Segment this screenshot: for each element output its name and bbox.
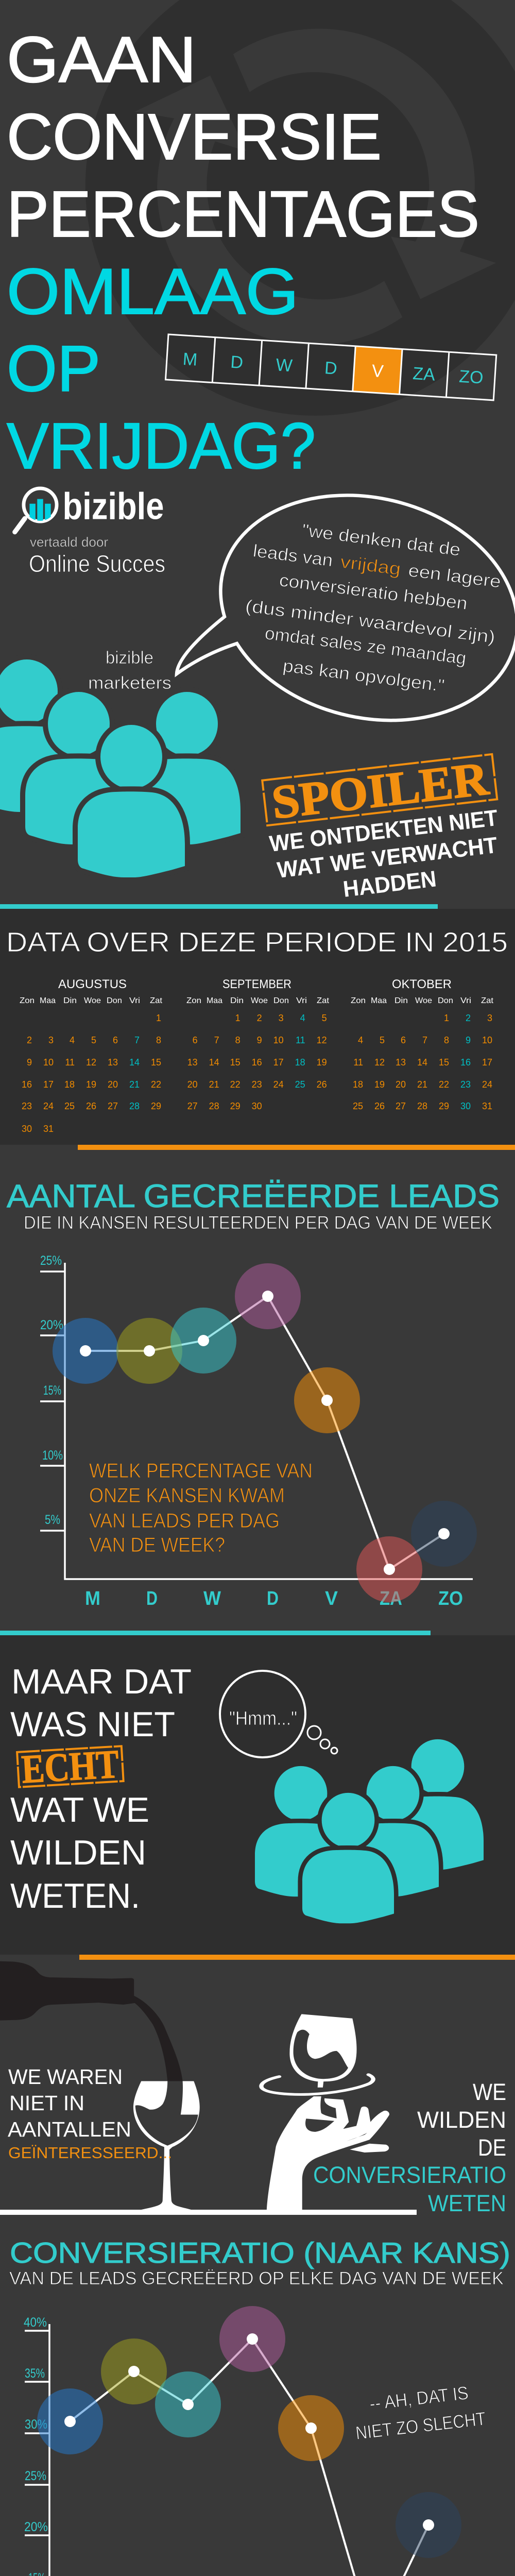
- text: we wilden de conversieratio weten: [313, 2079, 506, 2216]
- calendar: september: 30: [252, 1101, 262, 1111]
- calendar: oktober: 22: [439, 1079, 449, 1090]
- section background: calendar: [0, 909, 515, 1145]
- y axis labels: 30%: [25, 2417, 47, 2432]
- divider: orange: [79, 1955, 515, 1960]
- chart note: VAN DE WEEK?: [89, 1534, 225, 1556]
- calendar: oktober: 18: [353, 1079, 363, 1090]
- calendar: oktober: 4: [358, 1035, 363, 1045]
- heading: maar dat was niet echt wat we wilden weten: WILDEN: [10, 1833, 146, 1872]
- calendar: september: 17: [273, 1057, 284, 1067]
- text: we waren niet in aantallen geinteresseerd: GEÏNTERESSEERD...: [8, 2144, 172, 2162]
- weekday headers: Vri: [460, 996, 471, 1005]
- calendar: oktober: 29: [439, 1101, 449, 1111]
- y axis labels: 10%: [42, 1448, 63, 1463]
- speech bubble: marketers quote: omdat sales ze maandag: [264, 623, 468, 668]
- illustration: bottle pouring wine into glass: [0, 1961, 389, 2210]
- calendar: augustus: 8: [156, 1035, 161, 1045]
- y axis labels: 20%: [24, 2520, 48, 2534]
- speech bubble: marketers quote: (dus minder waardevol zijn): [244, 596, 496, 647]
- calendar: augustus: 22: [151, 1079, 161, 1090]
- weekday headers: Din: [394, 996, 408, 1005]
- calendar: augustus: 9: [27, 1057, 32, 1067]
- speech bubble: marketers quote: pas kan opvolgen.": [282, 656, 445, 696]
- calendar: september: 2: [257, 1013, 262, 1023]
- calendar: augustus: 3: [48, 1035, 54, 1045]
- calendar: oktober: 25: [353, 1101, 363, 1111]
- weekday headers: Zat: [150, 996, 163, 1005]
- section background: closing: [0, 1955, 515, 2576]
- calendar: augustus: 25: [64, 1101, 75, 1111]
- week strip with friday highlighted: D: [324, 358, 338, 379]
- divider: teal: [0, 1631, 431, 1635]
- heading: maar dat was niet echt wat we wilden weten: MAAR DAT: [11, 1662, 192, 1701]
- stamp: spoiler: SPOILER: [269, 752, 492, 829]
- calendar: oktober: 31: [482, 1101, 492, 1111]
- calendar: september: 8: [235, 1035, 241, 1045]
- shelf bar: white: [0, 2210, 417, 2215]
- icon: wine bottle and stream: [0, 1961, 183, 2081]
- data bubbles: [53, 1263, 477, 1602]
- label: bizible marketers: bizible: [106, 648, 153, 668]
- week strip with friday highlighted: ZO: [458, 367, 484, 388]
- calendar: augustus: 4: [70, 1035, 75, 1045]
- chart note: [89, 1460, 313, 1556]
- calendar: oktober: 27: [396, 1101, 406, 1111]
- calendar: augustus: 30: [22, 1124, 32, 1134]
- weekday headers: Zat: [481, 996, 494, 1005]
- speech bubble: marketers quote: leads van: [252, 541, 334, 570]
- calendar: augustus: 6: [113, 1035, 118, 1045]
- calendar: september: 28: [209, 1101, 219, 1111]
- x axis day labels: [85, 1588, 463, 1609]
- text: we wilden de conversieratio weten: DE: [478, 2134, 506, 2161]
- calendar: augustus: 23: [22, 1101, 32, 1111]
- stamp: echt: ECHT: [21, 1741, 120, 1791]
- calendar: september: 6: [193, 1035, 198, 1045]
- calendar: augustus: 20: [108, 1079, 118, 1090]
- calendar: augustus: 13: [108, 1057, 118, 1067]
- calendar: oktober: 30: [460, 1101, 471, 1111]
- divider: teal: [0, 904, 438, 909]
- calendar: augustus: 1: [156, 1013, 161, 1023]
- calendar: augustus: 15: [151, 1057, 161, 1067]
- calendar: oktober: 3: [487, 1013, 492, 1023]
- calendar: augustus: 27: [108, 1101, 118, 1111]
- calendar: oktober: 13: [396, 1057, 406, 1067]
- calendar: augustus: 2: [27, 1035, 32, 1045]
- calendar: augustus: 29: [151, 1101, 161, 1111]
- weekday headers: Woe: [84, 996, 101, 1005]
- calendar: oktober: 20: [396, 1079, 406, 1090]
- data points: [64, 2333, 434, 2576]
- week strip with friday highlighted: ZA: [412, 364, 436, 385]
- weekday headers: Zon: [186, 996, 201, 1005]
- calendar: oktober: 5: [380, 1035, 385, 1045]
- data line: [85, 1296, 444, 1569]
- weekday headers: Maa: [207, 996, 222, 1005]
- calendar: augustus: 28: [129, 1101, 140, 1111]
- title: PERCENTAGES: [7, 178, 479, 250]
- calendar: oktober: [353, 1013, 492, 1111]
- calendar: oktober: 1: [444, 1013, 449, 1023]
- text: we wilden de conversieratio weten: WILDEN: [417, 2107, 506, 2133]
- calendar: augustus: 26: [86, 1101, 96, 1111]
- heading: maar dat was niet echt wat we wilden weten: WAS NIET: [10, 1705, 175, 1744]
- weekday headers: [20, 996, 494, 1005]
- chart: conversieratio: [24, 2306, 487, 2576]
- divider: orange: [78, 1145, 515, 1150]
- subheading: die in kansen: DIE IN KANSEN RESULTEERDEN PER DAG VAN DE WEEK: [24, 1213, 492, 1233]
- heading: maar dat was niet echt wat we wilden weten: [10, 1662, 192, 1916]
- title: OMLAAG: [7, 255, 299, 328]
- x axis day labels: D: [267, 1588, 279, 1609]
- month labels: AUGUSTUS: [58, 977, 127, 991]
- text: we ontdekten niet wat we verwacht hadden: HADDEN: [342, 866, 438, 902]
- calendar: september: 13: [187, 1057, 198, 1067]
- calendar: oktober: 2: [466, 1013, 471, 1023]
- calendar: augustus: 16: [22, 1079, 32, 1090]
- credit: vertaald door Online Succes: [29, 534, 165, 577]
- calendar: augustus: 19: [86, 1079, 96, 1090]
- calendar: augustus: 5: [91, 1035, 96, 1045]
- calendar: augustus: 24: [43, 1101, 54, 1111]
- heading: aantal gecreeerde leads: AANTAL GECREËERDE LEADS: [7, 1178, 500, 1214]
- speech bubble: marketers quote: conversieratio hebben: [278, 570, 469, 614]
- calendar: augustus: 12: [86, 1057, 96, 1067]
- calendar: oktober: 19: [374, 1079, 385, 1090]
- calendar: september: 15: [230, 1057, 241, 1067]
- x axis day labels: ZO: [438, 1588, 463, 1609]
- people group: thinking: [255, 1739, 484, 1923]
- annotation: ah dat is niet zo slecht: [354, 2382, 487, 2444]
- y axis labels: 25%: [25, 2469, 46, 2483]
- weekday headers: Don: [107, 996, 122, 1005]
- calendar: oktober: 14: [417, 1057, 427, 1067]
- weekday headers: Woe: [251, 996, 268, 1005]
- title: CONVERSIE: [7, 100, 382, 173]
- calendar: september: 29: [230, 1101, 241, 1111]
- subheading: van de leads: VAN DE LEADS GECREËERD OP ELKE DAG VAN DE WEEK: [9, 2268, 504, 2289]
- heading: maar dat was niet echt wat we wilden weten: WAT WE: [10, 1790, 149, 1829]
- weekday headers: Don: [273, 996, 289, 1005]
- logo: bizible top: bizible: [63, 485, 164, 527]
- calendar: september: 12: [317, 1035, 327, 1045]
- calendar: september: 3: [279, 1013, 284, 1023]
- y axis labels: 15%: [43, 1383, 61, 1398]
- calendar: oktober: 9: [466, 1035, 471, 1045]
- x axis day labels: M: [85, 1588, 100, 1609]
- calendar: oktober: 23: [460, 1079, 471, 1090]
- week strip with friday highlighted: [165, 334, 496, 400]
- calendar: augustus: 10: [43, 1057, 54, 1067]
- calendar: oktober: 26: [374, 1101, 385, 1111]
- title: [7, 23, 479, 482]
- calendar: oktober: 21: [417, 1079, 427, 1090]
- weekday headers: Zat: [317, 996, 330, 1005]
- calendar: augustus: 14: [129, 1057, 140, 1067]
- text: we waren niet in aantallen geinteresseerd: WE WAREN: [8, 2065, 123, 2089]
- calendar: september: 19: [317, 1057, 327, 1067]
- calendar: september: 4: [300, 1013, 305, 1023]
- y axis labels: [40, 1253, 63, 1527]
- weekday headers: Vri: [296, 996, 307, 1005]
- calendar: augustus: 21: [129, 1079, 140, 1090]
- x axis day labels: V: [325, 1588, 338, 1609]
- calendar: oktober: 11: [353, 1057, 363, 1067]
- month labels: [58, 977, 452, 991]
- weekday headers: Din: [63, 996, 77, 1005]
- week strip with friday highlighted: M: [182, 349, 198, 370]
- weekday headers: Maa: [40, 996, 56, 1005]
- y axis labels: 25%: [40, 1253, 62, 1268]
- chart note: VAN LEADS PER DAG: [89, 1510, 280, 1532]
- weekday headers: Don: [438, 996, 453, 1005]
- title: VRIJDAG?: [7, 410, 316, 482]
- calendar: oktober: 16: [460, 1057, 471, 1067]
- calendar: september: 11: [296, 1035, 305, 1045]
- text: we ontdekten niet wat we verwacht hadden: WAT WE VERWACHT: [276, 833, 499, 883]
- section background: leads chart: [0, 1145, 515, 1635]
- credit: vertaald door Online Succes: Online Succes: [29, 550, 165, 577]
- calendar: september: 25: [295, 1079, 305, 1090]
- calendar: september: 7: [214, 1035, 219, 1045]
- y axis labels: [24, 2315, 48, 2576]
- x axis day labels: D: [146, 1588, 158, 1609]
- calendar: oktober: 10: [482, 1035, 492, 1045]
- speech bubble: marketers quote: een lagere: [407, 561, 502, 592]
- calendar: september: 16: [252, 1057, 262, 1067]
- watermark logo: [85, 0, 515, 416]
- text: we wilden de conversieratio weten: CONVERSIERATIO: [313, 2162, 506, 2188]
- title: OP: [7, 332, 100, 405]
- y axis labels: 5%: [45, 1513, 60, 1527]
- data bubbles: [37, 2306, 461, 2576]
- calendar: augustus: 31: [43, 1124, 54, 1134]
- text: we waren niet in aantallen geinteresseerd: NIET IN: [9, 2091, 84, 2115]
- section background: not what we wanted: [0, 1635, 515, 1955]
- weekday headers: Woe: [415, 996, 432, 1005]
- annotation: ah dat is niet zo slecht: NIET ZO SLECHT: [354, 2408, 487, 2444]
- calendar: oktober: 7: [422, 1035, 427, 1045]
- calendar: september: 14: [209, 1057, 219, 1067]
- icon: hand holding glass: [261, 2014, 389, 2210]
- text: we ontdekten niet wat we verwacht hadden: [268, 805, 499, 902]
- calendar: september: 20: [187, 1079, 198, 1090]
- calendar: september: 26: [317, 1079, 327, 1090]
- calendar: oktober: 28: [417, 1101, 427, 1111]
- month labels: SEPTEMBER: [222, 977, 291, 991]
- calendar: augustus: 11: [65, 1057, 75, 1067]
- text: we ontdekten niet wat we verwacht hadden: WE ONTDEKTEN NIET: [268, 805, 499, 857]
- logo: bizible top: [15, 485, 164, 532]
- calendar: september: 23: [252, 1079, 262, 1090]
- annotation: ah dat is niet zo slecht: -- AH, DAT IS: [368, 2382, 470, 2414]
- label: bizible marketers: [88, 648, 171, 693]
- month labels: OKTOBER: [392, 977, 452, 991]
- calendar: september: 27: [187, 1101, 198, 1111]
- calendar: september: 10: [273, 1035, 284, 1045]
- calendar: oktober: 8: [444, 1035, 449, 1045]
- weekday headers: Maa: [371, 996, 387, 1005]
- axes and ticks: [40, 1263, 473, 1579]
- x axis day labels: ZA: [380, 1588, 402, 1609]
- people group: marketers: [0, 659, 241, 877]
- calendar: oktober: 12: [374, 1057, 385, 1067]
- data points: [80, 1291, 450, 1575]
- axes and ticks: [25, 2324, 457, 2576]
- chart note: WELK PERCENTAGE VAN: [89, 1460, 313, 1482]
- y axis labels: 20%: [40, 1318, 63, 1332]
- text: we waren niet in aantallen geinteresseerd: [8, 2065, 172, 2162]
- data line: [70, 2339, 428, 2576]
- calendar: oktober: 17: [482, 1057, 492, 1067]
- speech bubble: marketers quote: "we denken dat de: [301, 520, 461, 560]
- calendar: oktober: 24: [482, 1079, 492, 1090]
- weekday headers: Din: [230, 996, 244, 1005]
- week strip with friday highlighted: D: [230, 352, 244, 372]
- heading: maar dat was niet echt wat we wilden weten: WETEN.: [10, 1876, 140, 1916]
- calendar: september: 5: [322, 1013, 327, 1023]
- weekday headers: Vri: [129, 996, 140, 1005]
- speech bubble: marketers quote: vrijdag: [339, 552, 402, 579]
- calendar: september: [187, 1013, 327, 1111]
- text: we wilden de conversieratio weten: WETEN: [428, 2190, 506, 2216]
- section background: intro: [0, 0, 515, 909]
- calendar: september: 18: [295, 1057, 305, 1067]
- heading: conversieratio naar kans: CONVERSIERATIO (NAAR KANS): [10, 2236, 510, 2269]
- week strip with friday highlighted: W: [275, 355, 293, 376]
- label: bizible marketers: marketers: [88, 673, 171, 693]
- calendar: augustus: 18: [64, 1079, 75, 1090]
- calendar: oktober: 6: [401, 1035, 406, 1045]
- text: we waren niet in aantallen geinteresseerd: AANTALLEN: [8, 2117, 131, 2141]
- x axis day labels: W: [203, 1588, 221, 1609]
- thought bubble: hmm: [220, 1671, 337, 1757]
- calendar: oktober: 15: [439, 1057, 449, 1067]
- calendar: september: 21: [209, 1079, 219, 1090]
- y axis labels: 40%: [24, 2315, 47, 2330]
- calendar: september: 9: [257, 1035, 262, 1045]
- speech bubble: marketers quote: [177, 495, 515, 720]
- thought bubble: hmm: "Hmm...": [229, 1708, 297, 1730]
- y axis labels: 35%: [25, 2366, 45, 2381]
- calendar: augustus: 7: [134, 1035, 140, 1045]
- credit: vertaald door Online Succes: vertaald door: [30, 534, 108, 550]
- calendar: september: 24: [273, 1079, 284, 1090]
- heading: data over deze periode: DATA OVER DEZE PERIODE IN 2015: [6, 927, 508, 958]
- calendar: september: 1: [235, 1013, 241, 1023]
- icon: wine glass: [133, 2081, 200, 2210]
- calendar: augustus: [22, 1013, 161, 1134]
- week strip with friday highlighted: V: [371, 361, 384, 381]
- weekday headers: Zon: [351, 996, 366, 1005]
- title: GAAN: [7, 23, 196, 96]
- calendar: september: 22: [230, 1079, 241, 1090]
- calendar: augustus: 17: [43, 1079, 54, 1090]
- chart: aantal gecreeerde leads: [40, 1253, 477, 1609]
- weekday headers: Zon: [20, 996, 35, 1005]
- chart note: ONZE KANSEN KWAM: [89, 1484, 285, 1507]
- text: we wilden de conversieratio weten: WE: [473, 2079, 506, 2105]
